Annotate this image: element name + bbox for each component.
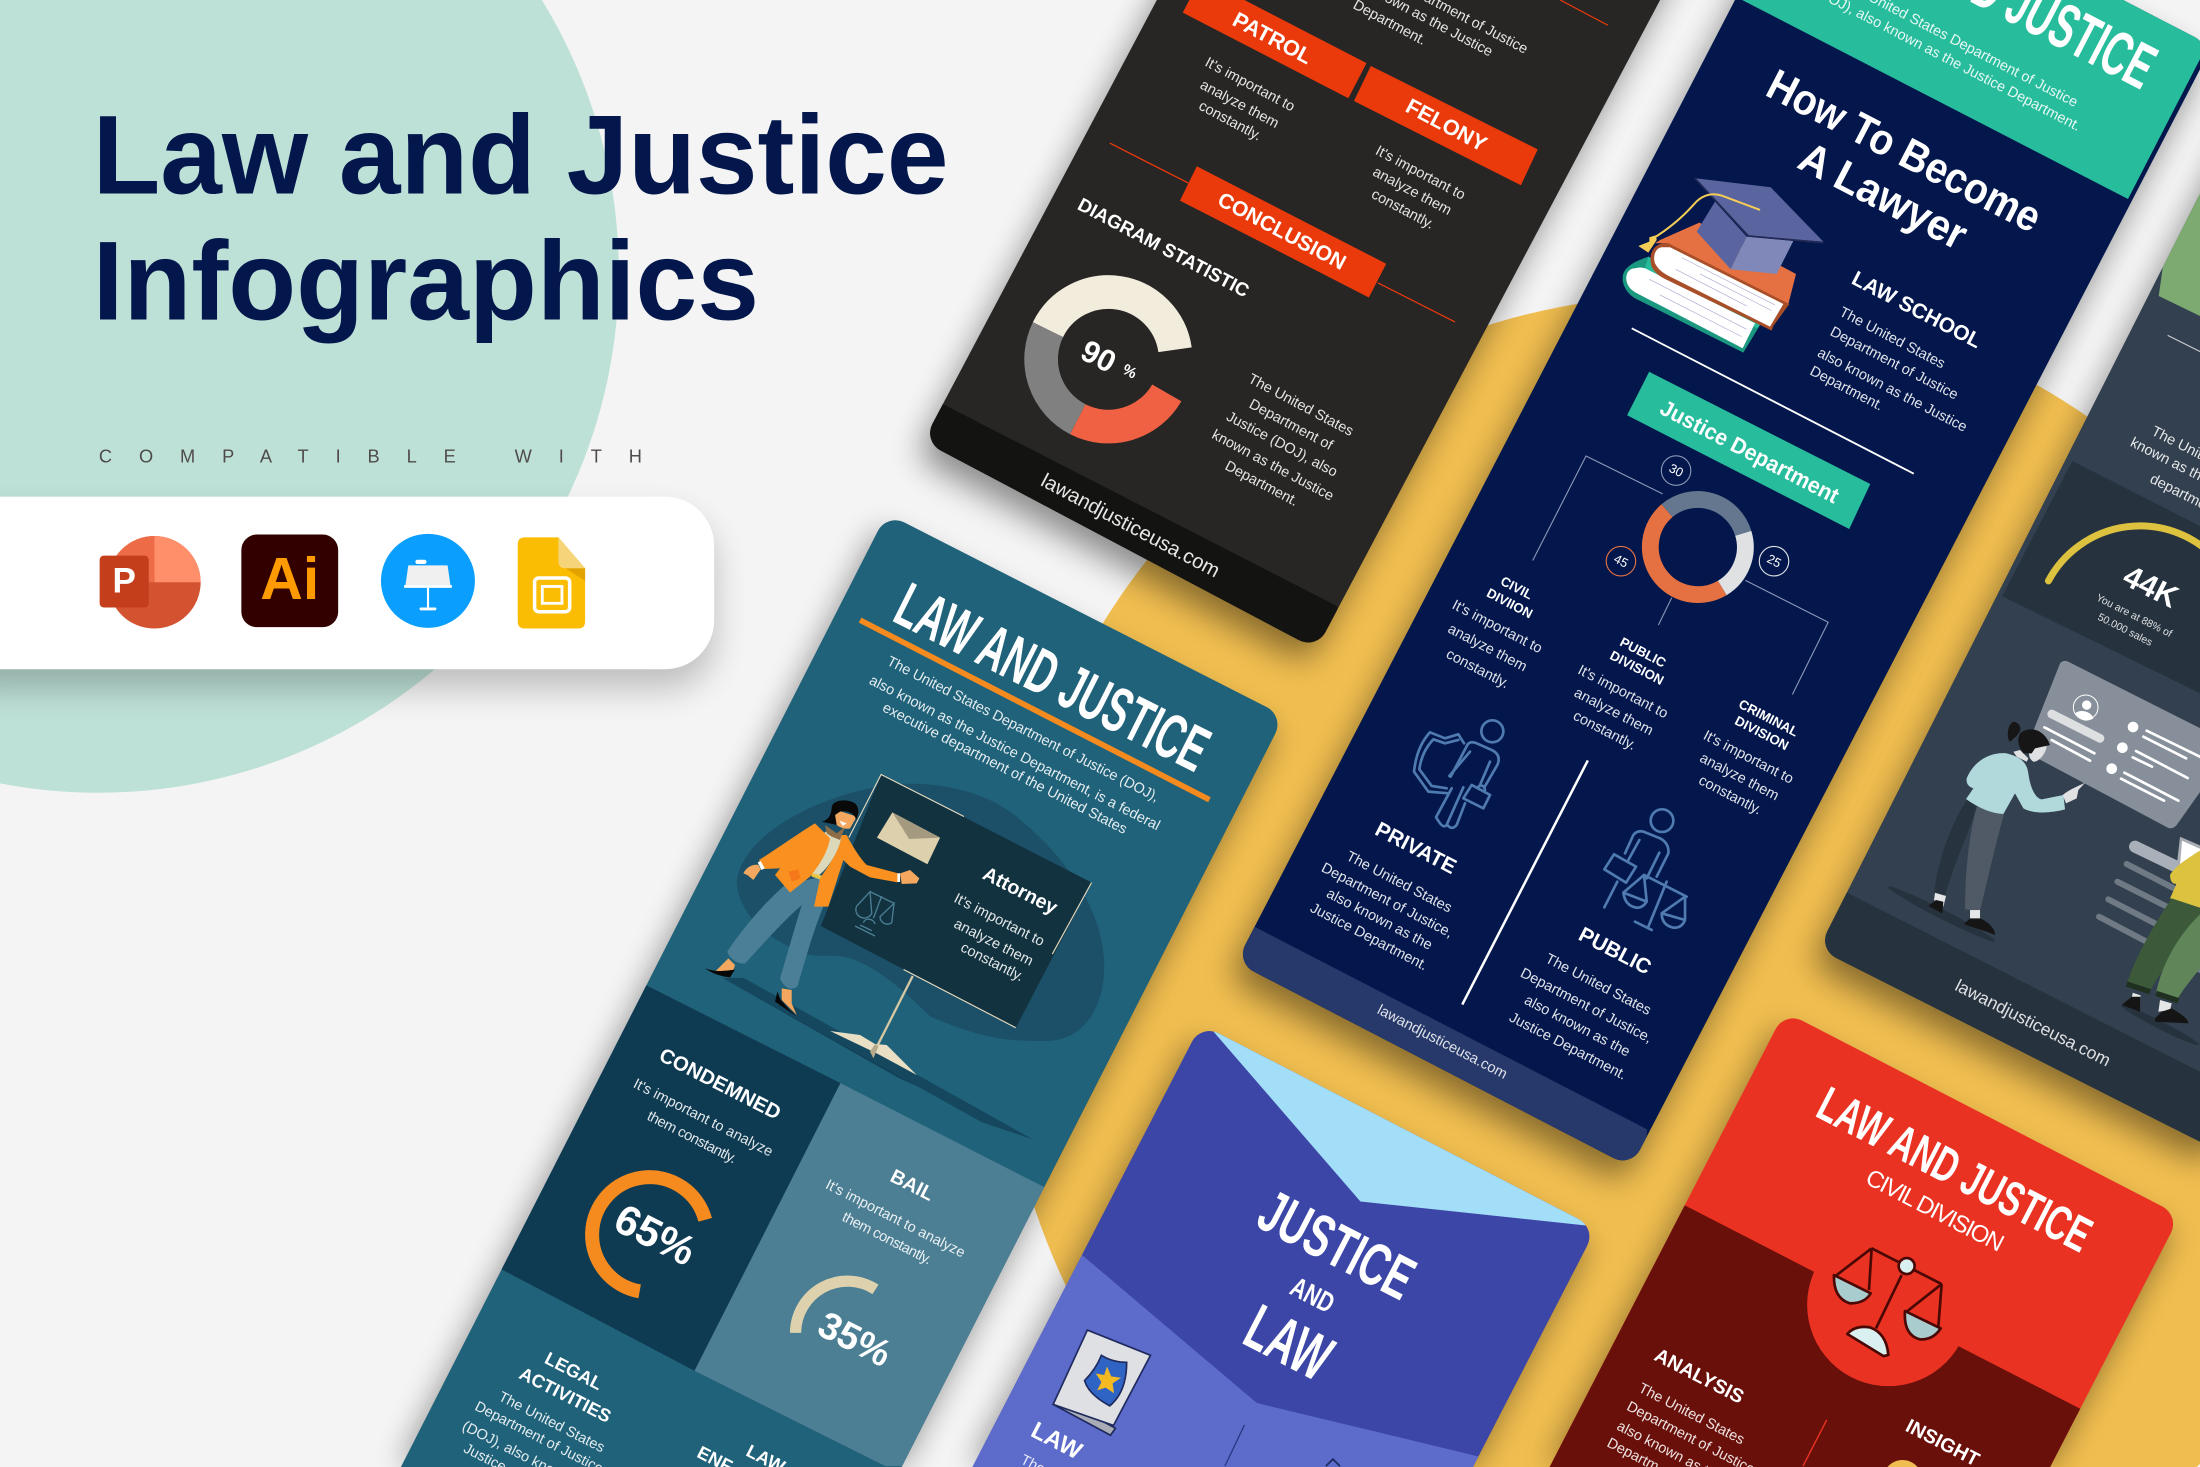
footer band — [1796, 892, 2200, 1207]
man — [2120, 837, 2200, 1048]
gauge 44K — [2048, 526, 2200, 649]
text: legal activities: The United States — [496, 1389, 607, 1456]
icon: law book — [1053, 1330, 1151, 1435]
icon: small outline — [1326, 1459, 1340, 1466]
board stand and base — [830, 976, 917, 1075]
donut chart: justice department — [1650, 500, 1745, 595]
text: law enforcement — [694, 1440, 789, 1467]
text: civil division: It's important to — [1449, 597, 1545, 657]
text: attorney: Attorney — [979, 863, 1061, 919]
heading: diagram statistic: DIAGRAM STATISTIC — [1074, 194, 1253, 302]
text: patrol body: constantly. — [1196, 98, 1264, 144]
heading: how to become a lawyer: A Lawyer — [1791, 133, 1975, 260]
text: criminal division: analyze them — [1697, 750, 1781, 804]
banner: felony: FELONY — [1402, 93, 1492, 157]
light blue fold — [1201, 1017, 1606, 1228]
banner: conclusion: CONCLUSION — [1214, 188, 1350, 275]
value: 45 — [1606, 546, 1636, 576]
dark gauge band — [2002, 461, 2200, 702]
gauge 65 percent — [592, 1177, 705, 1291]
text: civil division: CIVIL — [1498, 573, 1535, 602]
text: statistic body: The United States — [1245, 371, 1356, 440]
panel: slate card — [1796, 0, 2200, 1207]
mint circle — [0, 0, 619, 793]
text: public: Justice Department. — [1506, 1010, 1629, 1084]
illustration: dashboard and figures — [1886, 661, 2200, 1048]
panel: condemned: CONDEMNED — [655, 1044, 784, 1125]
panel: dark card — [905, 0, 1684, 676]
footer url: lawandjusticeusa.com — [1037, 470, 1223, 582]
icon: Keynote — [381, 534, 475, 628]
icon: PowerPoint: P — [113, 561, 136, 600]
value: 25 — [1759, 546, 1789, 576]
text: criminal division: CRIMINAL — [1736, 696, 1801, 740]
text: law label: LAW — [1027, 1417, 1087, 1465]
text: public division: constantly. — [1570, 708, 1639, 754]
illustration: books and graduation cap — [1623, 178, 1823, 353]
text: public — [1506, 923, 1655, 1084]
orange rule — [860, 620, 1209, 800]
heading: justice and law: JUSTICE — [1248, 1176, 1426, 1313]
panel: red card — [1529, 1003, 2200, 1467]
panel: condemned: It's important to analyze — [631, 1076, 775, 1160]
panel: bail — [695, 1083, 1047, 1466]
text: analysis — [1604, 1344, 1757, 1467]
panel: navy card — [1207, 0, 2200, 1207]
icon: scales — [1834, 1248, 1942, 1356]
panel: condemned: them constantly. — [644, 1108, 739, 1167]
text: patrol body: analyze them — [1197, 77, 1281, 132]
donut chart 90 percent — [1041, 292, 1175, 427]
gauge 35 percent — [796, 1281, 876, 1333]
icon: Illustrator: Ai — [260, 547, 319, 612]
divider — [1803, 1420, 1827, 1466]
lower purple panel — [940, 1242, 1501, 1467]
text: public division: DIVISION — [1608, 648, 1666, 688]
red circle — [1807, 1223, 1970, 1386]
icon: envelope — [877, 812, 940, 864]
text: felony body — [1372, 145, 1464, 229]
text: patrol body — [1199, 57, 1294, 140]
text: analysis: The United States — [1636, 1380, 1747, 1448]
text: legal activities: LEGAL — [542, 1347, 606, 1394]
text: law school: Department. — [1807, 363, 1886, 414]
text: attorney: analyze them — [951, 916, 1036, 970]
icon: Illustrator — [241, 535, 338, 627]
red divider lines — [1110, 0, 1608, 322]
text: civil division: analyze them — [1445, 621, 1529, 675]
icon: Google Slides — [518, 537, 585, 629]
value: 25: 25 — [1765, 552, 1783, 571]
text: felony body: analyze them — [1370, 164, 1454, 219]
illustration: attorney at board — [705, 774, 1104, 1139]
text: civil division: constantly. — [1443, 646, 1512, 692]
panel: bail: BAIL — [887, 1165, 937, 1206]
text: private: PRIVATE — [1371, 818, 1460, 879]
subheading: civil division: CIVIL DIVISION — [1861, 1164, 2008, 1258]
title — [93, 91, 948, 344]
text: attorney — [951, 863, 1061, 985]
banner: conclusion — [1180, 166, 1386, 297]
text: civil division — [1443, 573, 1545, 692]
text: statistic body: Department. — [1222, 458, 1301, 510]
heading: justice and law: LAW — [1234, 1291, 1344, 1395]
banner: justice department — [1627, 372, 1870, 529]
text: legal activities — [459, 1347, 615, 1467]
banner: patrol — [1183, 0, 1367, 98]
text: public division: analyze them — [1571, 685, 1656, 739]
text: legal activities: ACTIVITIES — [516, 1362, 615, 1427]
vertical divider — [1462, 760, 1588, 1005]
text: statistic body: Department of — [1246, 396, 1336, 454]
text: public: The United States — [1543, 951, 1654, 1019]
text: statistic body — [1209, 371, 1356, 510]
text: patrol body: It's important to — [1202, 55, 1297, 115]
gauge 44K: You are at 88% of — [2094, 592, 2174, 640]
footer band — [1221, 926, 1647, 1193]
icon: PowerPoint — [100, 536, 201, 629]
value: 45: 45 — [1611, 552, 1630, 571]
text: statistic body: known as the Justice — [1209, 427, 1336, 505]
panel: bail: It's important to analyze — [823, 1177, 968, 1261]
text: private: The United States — [1343, 849, 1454, 916]
gauge 44K: 44K — [2118, 558, 2184, 615]
text: criminal division — [1696, 696, 1801, 818]
text: private — [1307, 818, 1460, 974]
donut chart 90 percent: % — [1119, 361, 1140, 383]
dark lower panel — [1529, 1198, 2105, 1467]
text: law school: The United States — [1837, 304, 1948, 372]
icon: private lawyer — [1414, 720, 1503, 828]
text: private: also known as the — [1324, 886, 1435, 954]
text: attorney: constantly. — [958, 940, 1026, 985]
title: Law and Justice — [93, 91, 948, 217]
icon: yellow circle — [1888, 1460, 1918, 1467]
software pill — [0, 497, 714, 689]
dashboard board — [2025, 661, 2200, 828]
text: public division: It's important to — [1575, 662, 1670, 722]
compatible with label: COMPATIBLE WITH — [99, 445, 642, 466]
text: public: Department of Justice, — [1518, 965, 1654, 1047]
gauge 44K: 50.000 sales — [2096, 611, 2154, 649]
divider — [1632, 328, 1914, 474]
heading: justice and law — [1234, 1176, 1426, 1395]
text: statistic body: Justice (DOJ), also — [1224, 409, 1340, 481]
connector lines — [1533, 456, 1828, 694]
text: law school: LAW SCHOOL — [1848, 267, 1985, 353]
yellow circle — [999, 294, 2200, 1467]
text: criminal division: constantly. — [1696, 773, 1764, 818]
text: law school: also known as the Justice — [1815, 345, 1970, 436]
divider — [1225, 1425, 1245, 1466]
panel: condemned — [500, 985, 840, 1371]
heading: law and justice: LAW AND JUSTICE — [884, 570, 1220, 785]
green header — [2159, 182, 2200, 324]
bars — [2099, 847, 2200, 973]
text: public: also known as the — [1522, 992, 1633, 1060]
panel: bail: 35% — [811, 1304, 898, 1376]
text: criminal division: It's important to — [1700, 728, 1796, 788]
title: Infographics — [93, 218, 759, 344]
header band — [1742, 0, 2200, 199]
text: attorney: It's important to — [951, 891, 1047, 950]
heading: how to become a lawyer: How To Become — [1759, 61, 2049, 242]
text: intro: executive department of the United States — [880, 700, 1129, 838]
panel: condemned: 65% — [607, 1195, 703, 1275]
value: 30: 30 — [1667, 461, 1686, 480]
footer band — [930, 404, 1338, 642]
text: intro: also known as the Justice Department, is a federal — [866, 673, 1162, 834]
text: felony body: It's important to — [1373, 143, 1468, 204]
panel: blue card — [940, 1010, 1642, 1467]
panel: teal card — [379, 505, 1305, 1467]
icon: public lawyer — [1604, 809, 1687, 930]
heading: justice and law: AND — [1286, 1271, 1340, 1319]
text: public: PUBLIC — [1575, 923, 1655, 979]
footer url: lawandjusticeusa.com — [1374, 1002, 1510, 1083]
value: 30 — [1661, 456, 1691, 485]
woman at board — [1886, 722, 2085, 945]
text: law school: Department of Justice — [1827, 324, 1961, 403]
woman figure — [705, 800, 919, 1017]
banner: felony — [1354, 66, 1538, 185]
banner: justice department: Justice Department — [1656, 395, 1844, 509]
text: public division — [1570, 634, 1670, 754]
text: criminal division: DIVISION — [1732, 713, 1791, 753]
text: private: Department of Justice, — [1318, 860, 1455, 941]
text: intro: The United States Department of Justice (DOJ), — [884, 654, 1161, 805]
panel: bail: them constantly. — [839, 1209, 934, 1268]
donut chart 90 percent: 90 — [1075, 333, 1122, 380]
icon: small scales — [855, 892, 894, 936]
text: civil division: DIVIION — [1484, 585, 1535, 621]
text: law school — [1807, 267, 1985, 436]
footer url: lawandjusticeusa.com — [1952, 975, 2114, 1070]
banner: patrol: PATROL — [1229, 7, 1316, 69]
text: felony body: constantly. — [1368, 187, 1437, 233]
text: public division: PUBLIC — [1618, 634, 1669, 671]
divider — [2168, 335, 2200, 356]
text: private: Justice Department. — [1307, 900, 1430, 974]
text: analysis: ANALYSIS — [1651, 1344, 1747, 1408]
